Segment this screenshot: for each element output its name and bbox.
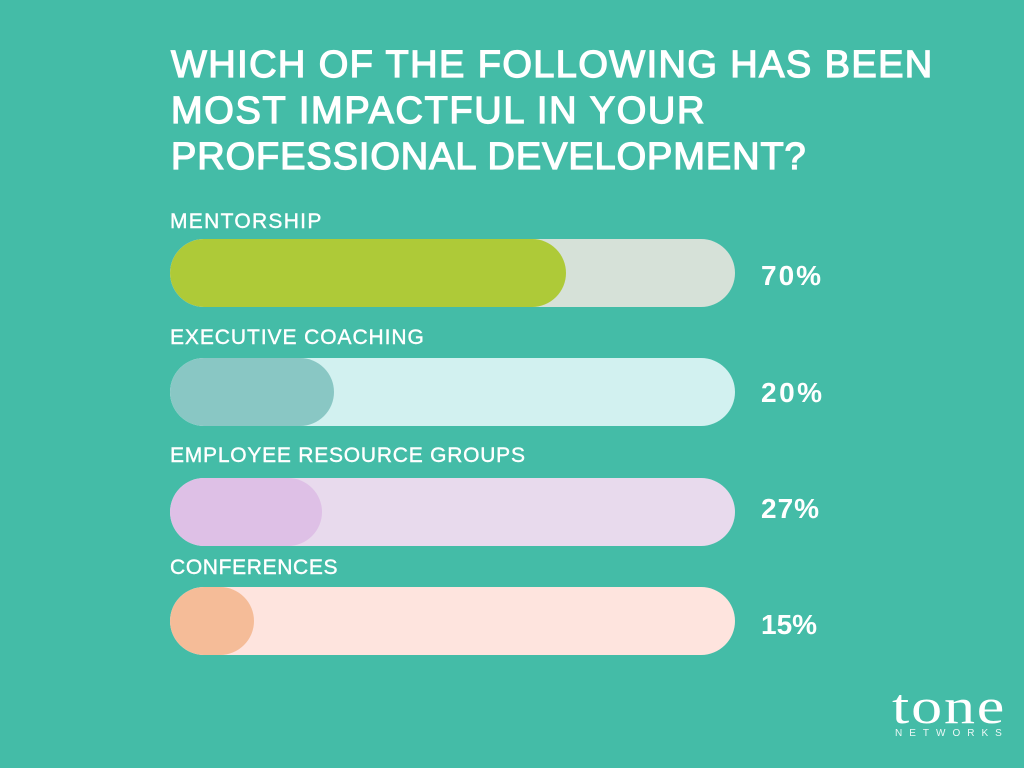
bar: executive coaching 20%: [170, 358, 735, 426]
logo: tone networks: NETWORKS: [895, 728, 1009, 739]
label: mentorship: MENTORSHIP: [170, 210, 323, 233]
title: WHICH OF THE FOLLOWING HAS BEEN: [171, 44, 934, 86]
title: [170, 44, 934, 178]
label: conferences: CONFERENCES: [170, 556, 338, 579]
logo: tone networks: tone: [892, 678, 1006, 734]
value: conferences: 15%: [761, 609, 817, 640]
title: MOST IMPACTFUL IN YOUR: [171, 90, 706, 132]
value: employee resource groups: 27%: [761, 493, 820, 524]
value: executive coaching: 20%: [761, 377, 825, 408]
label: executive coaching: EXECUTIVE COACHING: [170, 326, 425, 349]
value: mentorship: 70%: [761, 260, 823, 291]
title: PROFESSIONAL DEVELOPMENT?: [171, 136, 807, 178]
bar: mentorship 70%: [170, 239, 735, 307]
bar: employee resource groups 27%: [170, 478, 735, 546]
label: employee resource groups: EMPLOYEE RESOURCE GROUPS: [170, 444, 526, 467]
bar: conferences 15%: [170, 587, 735, 655]
